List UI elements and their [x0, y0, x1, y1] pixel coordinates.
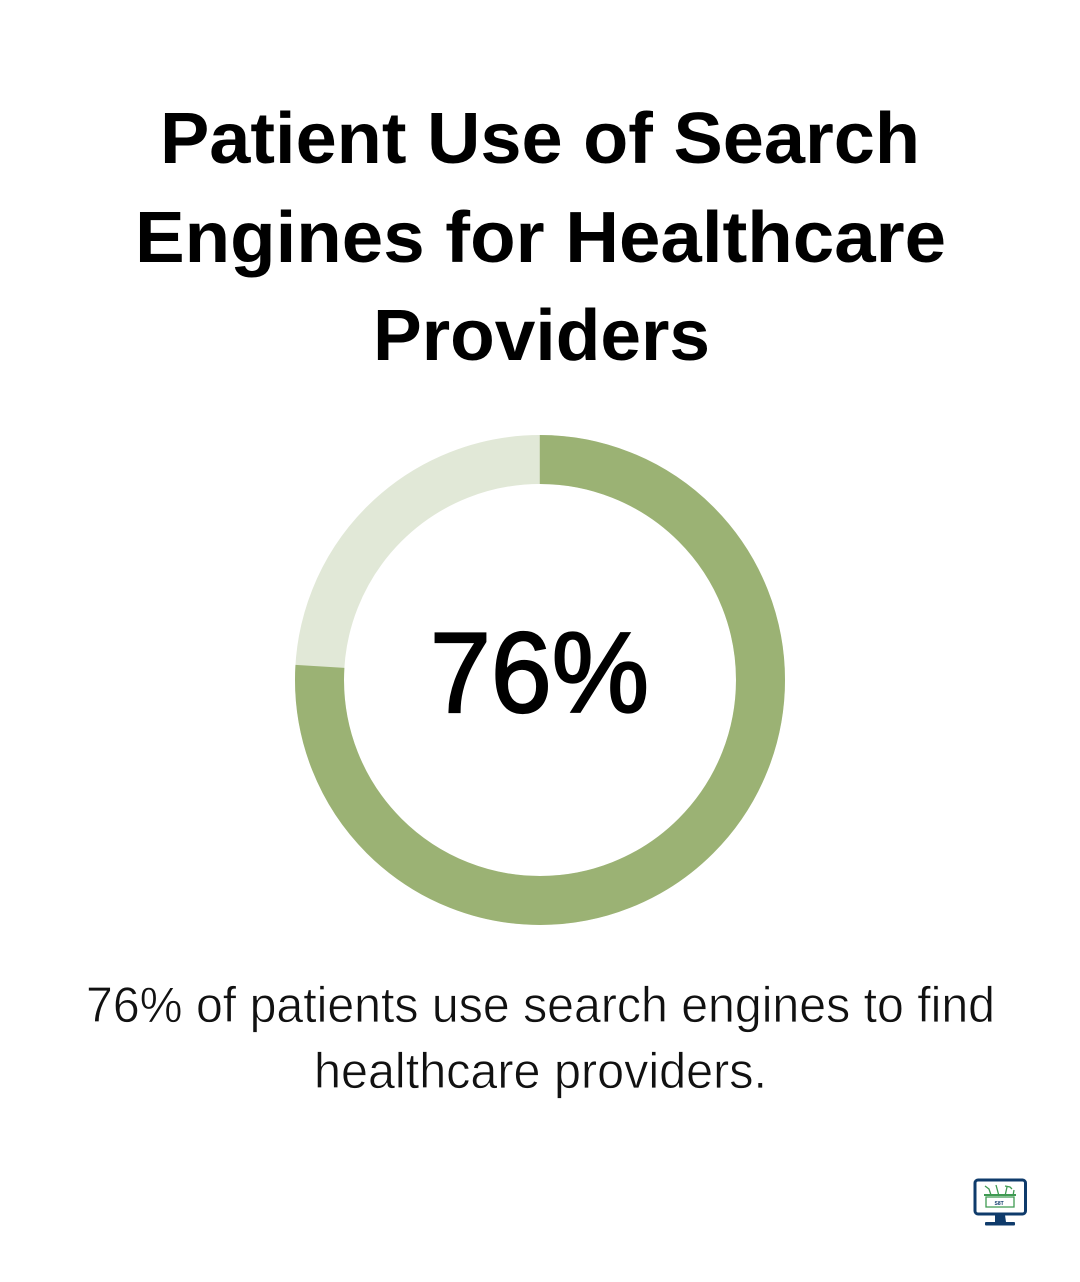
caption: 76% of patients use search engines to find — [86, 977, 995, 1033]
caption: healthcare providers. — [314, 1043, 767, 1099]
icon: monitor with toolbox logo: S8T — [994, 1201, 1004, 1207]
title: Patient Use of Search — [160, 99, 920, 179]
title: Providers — [373, 296, 710, 376]
title: Engines for Healthcare — [135, 198, 946, 278]
title — [135, 99, 946, 376]
caption — [86, 977, 995, 1099]
donut chart: 76% — [320, 460, 760, 900]
donut value: 76% — [430, 610, 649, 737]
icon: monitor with toolbox logo — [975, 1180, 1026, 1226]
